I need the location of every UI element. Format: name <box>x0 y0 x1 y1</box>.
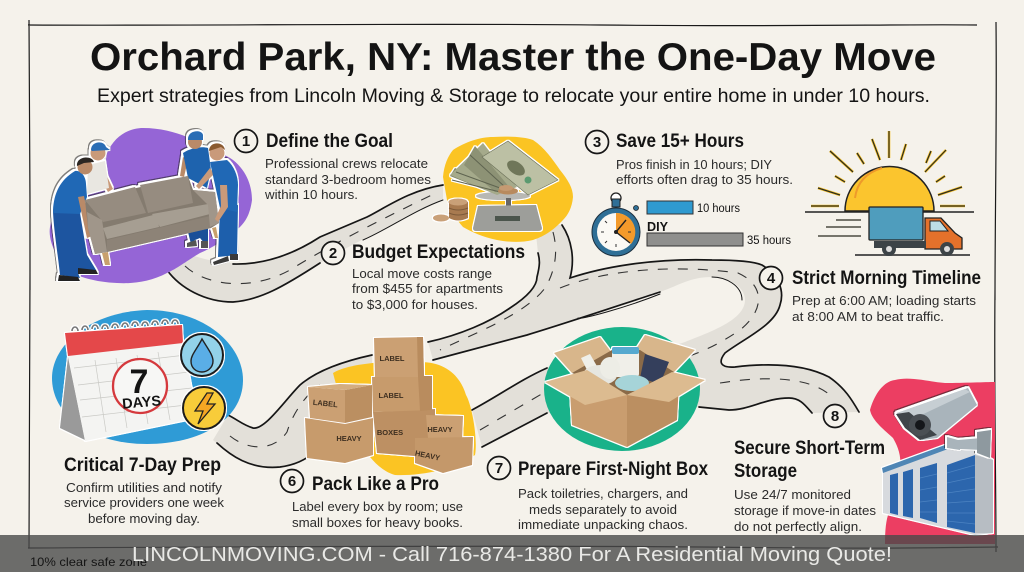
step 5: critical 7-day prep: Critical 7-Day Prep <box>64 455 221 476</box>
icon: cardboard boxes: LABEL <box>378 391 404 400</box>
step 7: prepare first-night box: 7 <box>495 460 503 477</box>
step 6: pack like a pro: Label every box by room; use <box>292 499 463 514</box>
step 8: secure short-term storage: do not perfectly align. <box>734 519 862 534</box>
step 5: critical 7-day prep: service providers one week <box>64 495 224 510</box>
winding road <box>167 185 859 467</box>
step 3: save 15+ hours: Save 15+ Hours <box>616 131 744 152</box>
icon: open box with toiletries <box>545 335 705 447</box>
icon: cardboard boxes: HEAVY <box>414 449 441 463</box>
icon: rising sun <box>805 131 974 236</box>
step 6: pack like a pro: small boxes for heavy books. <box>292 515 463 530</box>
panel: money scale illustration <box>433 137 573 242</box>
icon: movers carrying a sofa <box>53 131 238 281</box>
bar: pros 10 hours <box>647 201 740 215</box>
step 2: budget expectations: Local move costs range <box>352 266 492 281</box>
green circle <box>544 327 700 451</box>
blue blob <box>52 310 243 444</box>
bar: DIY 35 hours <box>647 233 791 247</box>
callout: 7 days: DAYS <box>122 393 162 413</box>
step 4: strict morning timeline: at 8:00 AM to beat traffic. <box>792 309 944 324</box>
step 7: prepare first-night box: meds separately to avoid <box>529 502 677 517</box>
icon: banknotes on a scale <box>433 141 558 231</box>
icon: cardboard boxes <box>305 337 473 473</box>
step 6: pack like a pro: Pack Like a Pro <box>312 474 439 495</box>
red blob <box>870 379 995 544</box>
icon: moving truck <box>855 207 970 256</box>
step 2: budget expectations: Budget Expectations <box>352 242 525 263</box>
step 4: strict morning timeline: 4 <box>767 270 776 287</box>
step 3: save 15+ hours <box>586 130 793 187</box>
icon: cardboard boxes: LABEL <box>312 398 339 409</box>
step 1: define the goal: 1 <box>242 133 250 150</box>
icon: cardboard boxes: LABEL <box>380 354 405 363</box>
step 8: secure short-term storage: Storage <box>734 461 797 482</box>
step 5: critical 7-day prep: Confirm utilities and notify <box>66 480 223 495</box>
yellow blob <box>333 362 476 475</box>
step 8: secure short-term storage <box>734 404 885 534</box>
panel: first-night box illustration <box>544 327 705 451</box>
step 6: pack like a pro <box>280 470 463 530</box>
icon: desk calendar <box>60 320 197 441</box>
step 3: save 15+ hours: efforts often drag to 35 hours. <box>616 172 793 187</box>
icon: stopwatch <box>592 193 640 256</box>
panel: stopwatch and hour bars <box>592 193 791 256</box>
panel: stacked boxes illustration <box>305 337 476 475</box>
step 2: budget expectations: to $3,000 for houses. <box>352 297 478 312</box>
yellow blob <box>443 137 573 242</box>
footer banner text: LINCOLNMOVING.COM - Call 716-874-1380 For A Residential Moving Quote! <box>132 543 892 566</box>
step 2: budget expectations: 2 <box>329 245 337 262</box>
step 8: secure short-term storage: storage if move-in dates <box>734 503 877 518</box>
step 7: prepare first-night box: immediate unpacking chaos. <box>518 517 688 532</box>
step 1: define the goal <box>234 130 432 202</box>
step 1: define the goal: standard 3-bedroom homes <box>265 172 432 187</box>
subtitle: Expert strategies from Lincoln Moving & Storage to relocate your entire home in under 10 hours. <box>97 85 930 107</box>
icon: security camera <box>896 388 991 458</box>
footer banner background <box>0 535 1024 572</box>
icon: cardboard boxes: HEAVY <box>427 425 453 434</box>
step 7: prepare first-night box: Prepare First-Night Box <box>518 459 708 480</box>
panel: secure storage illustration <box>870 379 995 544</box>
panel: calendar illustration <box>52 310 243 444</box>
icon: cardboard boxes: BOXES <box>377 428 403 437</box>
title: Orchard Park, NY: Master the One-Day Move <box>90 36 936 79</box>
panel: movers illustration <box>50 128 252 283</box>
step 3: save 15+ hours: 3 <box>593 134 601 151</box>
step 4: strict morning timeline: Strict Morning Timeline <box>792 268 981 289</box>
step 1: define the goal: Define the Goal <box>266 131 393 152</box>
safe zone note: 10% clear safe zone <box>30 555 147 569</box>
bar: DIY 35 hours: 35 hours <box>747 235 791 247</box>
step 1: define the goal: within 10 hours. <box>264 187 358 202</box>
callout: 7 days <box>122 363 162 413</box>
icon: water drop <box>181 334 223 376</box>
icon: cardboard boxes: HEAVY <box>336 434 362 443</box>
step 8: secure short-term storage: Secure Short-Term <box>734 438 885 459</box>
step 4: strict morning timeline <box>760 266 981 324</box>
callout: 7 days: 7 <box>130 363 148 401</box>
step 8: secure short-term storage: Use 24/7 monitored <box>734 487 851 502</box>
purple blob <box>50 128 252 283</box>
step 7: prepare first-night box: Pack toiletries, chargers, and <box>518 486 688 501</box>
step 5: critical 7-day prep <box>64 455 224 526</box>
step 2: budget expectations: from $455 for apartments <box>352 281 504 296</box>
step 3: save 15+ hours: Pros finish in 10 hours; DIY <box>616 157 772 172</box>
panel: sunrise and truck illustration <box>805 131 974 256</box>
step 4: strict morning timeline: Prep at 6:00 AM; loading starts <box>792 293 977 308</box>
bar: pros 10 hours: 10 hours <box>697 203 740 215</box>
icon: lightning bolt <box>183 387 225 429</box>
step 8: secure short-term storage: 8 <box>831 408 839 425</box>
icon: storage units <box>882 445 993 535</box>
sofa <box>85 176 219 265</box>
step 2: budget expectations <box>322 242 525 312</box>
bar label: DIY: DIY <box>647 220 669 234</box>
step 1: define the goal: Professional crews relocate <box>265 156 428 171</box>
step 5: critical 7-day prep: before moving day. <box>88 511 200 526</box>
step 6: pack like a pro: 6 <box>288 473 296 490</box>
step 7: prepare first-night box <box>488 456 708 532</box>
